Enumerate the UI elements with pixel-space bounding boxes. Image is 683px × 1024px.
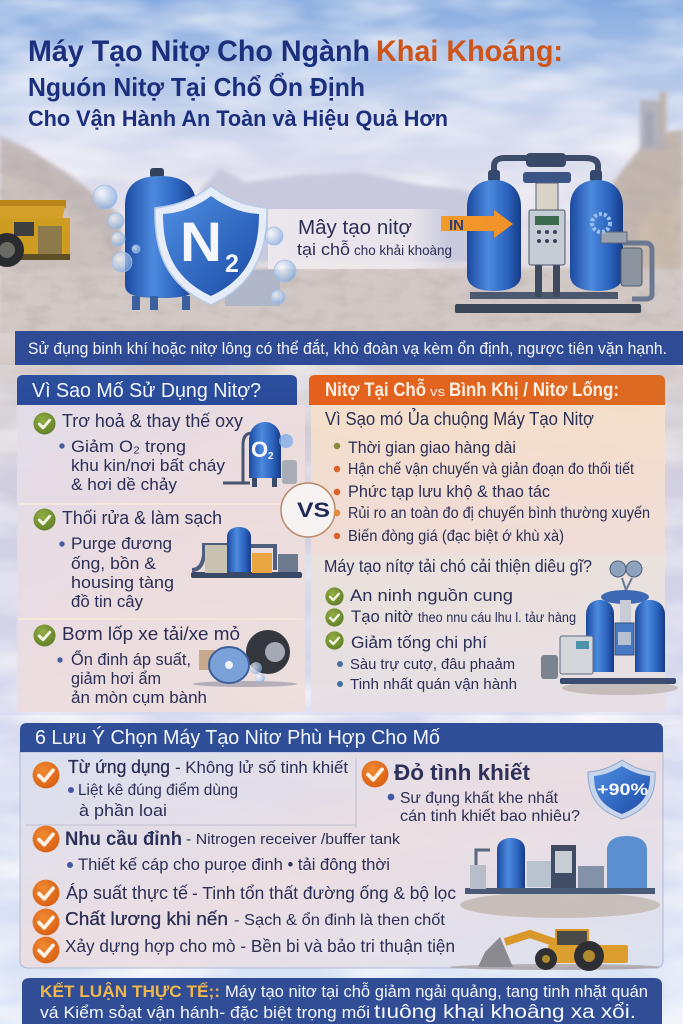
note 3 desc: - Nitrogen receiver /buffer tank [186,831,401,848]
tank [150,168,164,178]
note 6 [33,936,455,963]
note 2 text: cán tinh khiết bao nhiêu? [400,808,580,825]
item heading: Bơm lốp xe tải/xe mỏ [62,624,240,644]
title highlight: Khai Khoáng: [376,35,563,68]
note 2 text: Sư đụng khất khe nhất [400,790,559,807]
item: inert [33,411,243,494]
note 1 title: Từ ứng dụng [68,757,170,777]
note 6 text: Xảy dựng hợp cho mò - Bền bi và bảo tri thuận tiện [65,936,455,956]
note 3 bullet: Thiết kế cáp cho purọe đinh • tải đông thời [78,855,390,874]
panel heading: 6 Lưu Ý Chọn Máy Tạo Nitơ Phù Hợp Cho Mố [35,726,440,749]
icon: tyres [193,630,297,687]
benefit list [325,586,576,693]
item text: & hơi dề chảy [71,475,177,494]
nitrogen generator [455,153,652,313]
icon: O2 tank [223,422,297,487]
benefit 3 detail 1: Sàu trự cutợ, đâu phaảm [350,656,515,673]
gear mark [592,214,610,232]
icon: wheel loader [450,930,660,971]
note 3 title: Nhu cầu đỉnh [65,828,182,850]
benefit 2b: theo nnu cáu lhu l. tảư hàng [418,610,576,625]
subheading drawbacks: Vì Sạo mó Ủa chuộng Máy Tạo Nitợ [325,408,594,429]
note 1 bullet: Liệt kê đúng điểm dùng [78,781,238,799]
drawback 3: Phức tạp lưu khộ & thao tác [348,483,550,501]
generator base [455,304,641,313]
mining truck [0,200,70,267]
orange arrow [441,210,513,238]
top pipes [494,158,598,180]
note 5 [33,909,446,935]
title line 3: Cho Vận Hành An Toàn và Hiệu Quả Hơn [28,106,448,131]
item: tyres [33,624,240,707]
panel: 6 selection notes [20,723,663,971]
panel heading vs: vs [430,384,446,399]
caption strip [268,209,452,269]
title [28,35,563,131]
panel: onsite vs cylinders [309,375,678,712]
caption line 2a: tại chỗ [297,240,350,259]
note 2 [362,760,655,825]
icon: purge skid [191,527,302,578]
note 4 [33,880,456,906]
conclusion line 1: Máy tạo nitơ tại chỗ giảm ngải quảng, tang tinh nhặt quán [225,982,648,1001]
drawback 5: Biến đòng giá (đạc biệt ớ khù xà) [348,528,564,545]
note 5 title: Chất lương khi nến [65,909,228,929]
icon: equipment row [460,836,660,918]
benefit 2a: Tạo nitờ [351,608,413,626]
conclusion label: KẾT LUẬN THỰC TẾ;: [40,982,220,1001]
note 4 title: Áp suất thực tế [66,883,188,903]
vs badge [281,483,335,537]
control panel [529,210,565,265]
conclusion line 2a: vá Kiểm sỏạt vận hánh- đặc biệt trọng mối [40,1004,370,1022]
bullet [59,443,65,449]
shield label subscript: 2 [225,250,239,278]
panel header [17,375,297,405]
side filter [622,243,652,299]
purity shield badge [588,760,655,819]
item text: đồ tin cây [71,592,143,611]
item text: ống, bồn & [71,554,157,573]
bubbles [93,185,296,304]
drawback 4: Rủi ro an toàn đo đị chuyến bình thường xuyến [348,505,650,522]
item text: Ổn đinh áp suất, [71,650,191,669]
O2 label: O [251,437,268,462]
bullet [57,657,63,663]
caption line 2b: cho khải khoàng [354,242,452,258]
drawback list [334,439,650,545]
drawback 1: Thời gian giao hàng dài [348,439,516,457]
item: purge [33,508,222,611]
bullet [59,541,65,547]
gauges [610,561,626,577]
panel: why mines use nitrogen [17,375,305,712]
note 3 [33,826,401,874]
dividers [25,758,356,828]
benefit 3 detail 2: Tinh nhất quán vận hành [350,676,517,693]
drawback 2: Hận chế vận chuyến và giản đoạn đo thối tiết [348,461,635,478]
panel heading part 2: Bình Khị / Nitơ Lống: [449,380,619,401]
item text: giảm hơi ẩm [71,669,161,688]
conclusion line 2b: tıuông khại khoâng xa xổi. [374,1002,636,1023]
note 1 bullet: à phần loai [79,801,167,820]
icon: generator [541,561,678,695]
banner text: Sử đụng binh khí hoặc nitợ lông có thể đắt, khò đoàn vạ kèm ổn định, ngược tiên vặn hạnh. [28,339,667,358]
shield [155,186,267,305]
item heading: Thối rửa & làm sạch [62,508,222,528]
left column [488,170,500,182]
note 1 [33,757,348,820]
benefit 3: Giảm tống chi phí [351,633,487,652]
item heading: Trơ hoả & thay thế oxy [62,411,243,431]
note 4 desc: - Tinh tổn thất đường ống & bộ lọc [192,883,456,903]
purity value: +90% [597,780,648,799]
panel header [309,375,665,405]
conclusion banner [22,978,662,1024]
item text: Purge đương [71,534,172,553]
small equipment behind [225,270,280,306]
item text: khu kin/nơi bất cháy [71,456,225,475]
title line 1: Máy Tạo Nitợ Cho Ngành [28,35,370,68]
icon: O2 tank: 2 [268,451,274,462]
right column [590,170,602,182]
item text: Giảm O₂ trọng [71,437,186,456]
benefit 1: An ninh nguồn cung [350,586,513,605]
item text: ản mòn cụm bành [71,688,207,707]
intro banner [15,331,683,365]
arrow label: IN [449,217,464,234]
nitrogen tank with shield [93,168,296,310]
note 2 title: Đỏ tình khiết [394,760,531,785]
note 5 desc: - Sạch & ổn đinh là then chốt [234,911,446,929]
panel heading text: Vì Sao Mố Sử Dụng Nitợ? [32,380,261,402]
panel header [20,723,663,752]
title line 2: Nguón Nitợ Tại Chổ Ổn Định [28,72,365,102]
shield label N2: N [180,210,222,273]
note 1 desc: - Không lử số tinh khiết [175,759,348,777]
overlapping bullets [334,489,340,516]
section divider shade [19,503,304,505]
caption line 1: Mây tạo nitợ [298,217,412,239]
item text: housing tàng [71,573,174,592]
vs text: VS [297,499,330,522]
subheading benefits: Máy tạo nítợ tải chó cải thiện diêu gĩ? [324,556,592,576]
legs [535,265,542,297]
check icon [33,412,56,435]
panel heading part 1: Nitợ Tại Chỗ [325,379,426,401]
